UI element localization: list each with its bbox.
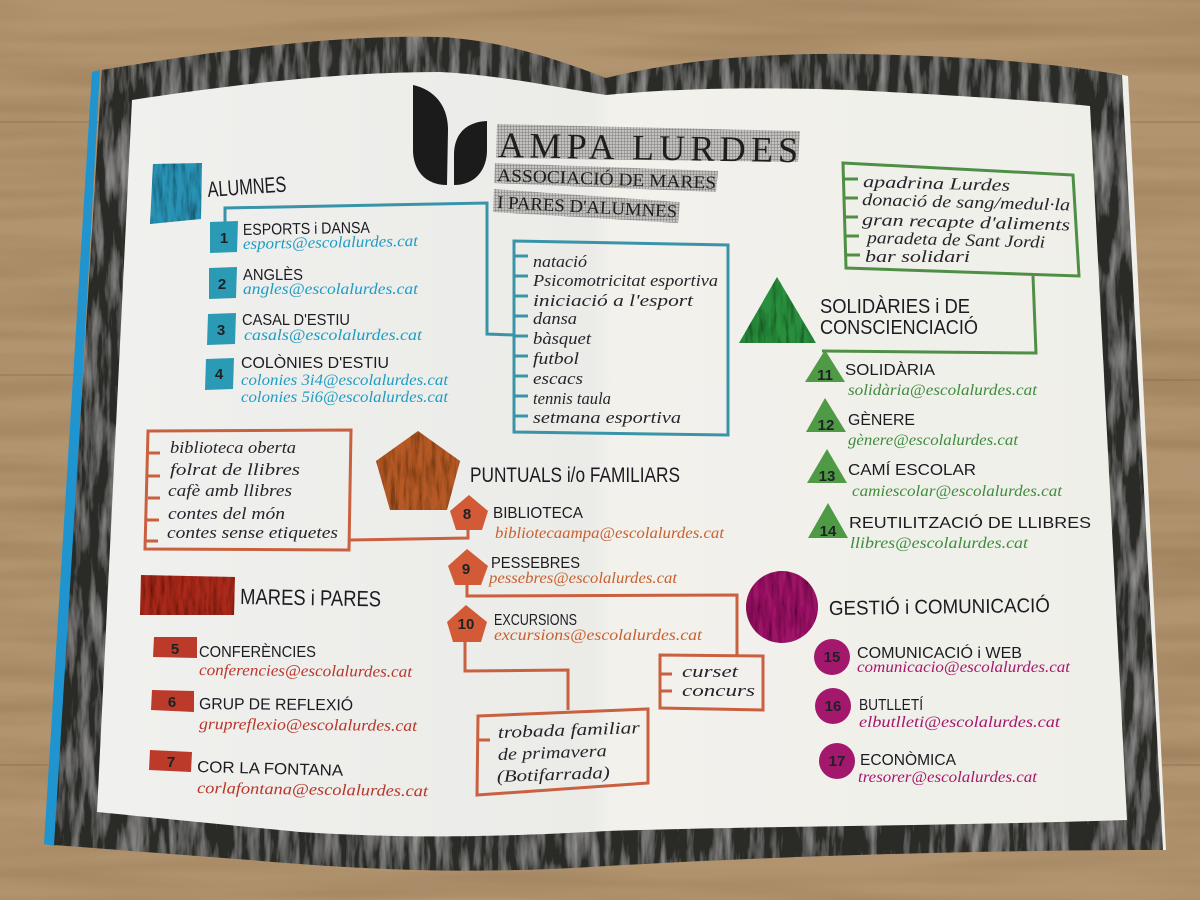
item 17: ECONÒMICA [860,750,956,769]
item 10: EXCURSIONS [494,612,577,629]
item 16: BUTLLETÍ [859,695,923,714]
item 5: CONFERÈNCIES [199,642,316,661]
panel: trobada familiar: trobada familiar [497,718,641,742]
panel: solidarity activities list: apadrina Lurdes [863,172,1011,195]
item 7: 7 [167,754,175,771]
panel: biblioteca activities list: contes del món [168,504,285,523]
item 1: 1 [220,230,228,247]
item 6: GRUP DE REFLEXIÓ [199,694,353,714]
panel: trobada familiar [477,709,648,795]
panel: curset concurs: curset [682,662,740,681]
item 3: CASAL D'ESTIU [242,312,350,329]
item 9: pessebres@escolalurdes.cat [488,570,678,587]
connector to curset box [467,585,737,655]
item 7 [149,750,429,800]
icon: green textured triangle [739,277,816,343]
item 5: conferencies@escolalurdes.cat [199,662,413,681]
panel: curset concurs: concurs [682,681,756,700]
section: alumnes [150,163,514,406]
panel: esports activities list: natació [533,252,588,271]
item 1: ESPORTS i DANSA [243,220,370,239]
heading: PUNTUALS i/o FAMILIARS [470,464,680,487]
item 8 [450,495,725,542]
panel: esports activities list: Psicomotricitat esportiva [532,271,718,290]
item 5 [153,637,413,681]
item 14: REUTILITZACIÓ DE LLIBRES [849,513,1091,532]
white page edge [1118,74,1166,850]
panel: solidarity activities list: gran recapte d'aliments [862,210,1071,234]
icon: orange textured pentagon [376,431,460,510]
item 9 [448,549,678,587]
item 15: COMUNICACIÓ i WEB [857,643,1022,662]
panel: esports activities list: futbol [533,349,579,368]
item 6: grupreflexio@escolalurdes.cat [199,716,418,735]
item 3: 3 [217,322,225,339]
item 2: angles@escolalurdes.cat [243,281,419,298]
panel: esports activities list: iniciació a l'esport [533,291,695,310]
item 10 [447,605,703,644]
item 3: casals@escolalurdes.cat [244,327,423,344]
item 10: excursions@escolalurdes.cat [494,627,703,644]
item 4: colonies 5i6@escolalurdes.cat [241,389,449,406]
icon: blue textured square [150,163,202,224]
section: gestió i comunicació [746,571,1071,786]
item 10: 10 [458,616,474,633]
item 4: 4 [215,366,224,383]
item 13: 13 [819,468,835,485]
item 6: 6 [168,694,176,711]
panel: esports activities list: setmana esportiva [533,408,681,427]
item 12 [806,398,1019,449]
section: solidàries i de conscienciació: CONSCIENCIACIÓ [820,316,978,339]
title: AMPA LURDES: AMPA LURDES [498,125,799,170]
connector to biblioteca list [350,528,468,540]
logo [413,85,487,185]
panel: biblioteca activities list: folrat de llibres [170,460,300,479]
item 15 [814,639,1071,676]
panel: biblioteca activities list: cafè amb llibres [168,481,292,500]
item 17: tresorer@escolalurdes.cat [858,769,1038,786]
panel: biblioteca activities list: biblioteca oberta [170,438,296,457]
item 12: 12 [818,417,834,434]
item 15: comunicacio@escolalurdes.cat [857,659,1071,676]
item 1 [210,220,419,253]
heading: SOLIDÀRIES i DE [820,295,970,318]
item 14: llibres@escolalurdes.cat [850,535,1029,552]
item 4: colonies 3i4@escolalurdes.cat [241,372,449,389]
item 14: 14 [820,523,837,540]
item 11: SOLIDÀRIA [845,360,935,379]
item 16: 16 [825,698,841,715]
item 6 [151,690,418,735]
item 16 [815,688,1061,731]
item 14 [808,503,1091,552]
panel: esports activities list: escacs [533,369,583,388]
item 4: COLÒNIES D'ESTIU [241,353,389,372]
panel: solidarity activities list: bar solidari [865,247,970,266]
item 11: solidària@escolalurdes.cat [848,382,1038,399]
item 12: gènere@escolalurdes.cat [848,432,1019,449]
item 15: 15 [824,649,840,666]
panel: esports activities list [514,241,728,435]
item 7: COR LA FONTANA [197,759,344,780]
item 2: 2 [218,276,226,293]
heading: ALUMNES [207,172,287,202]
item 2: ANGLÈS [243,265,303,284]
icon: purple textured circle [746,571,818,643]
subtitle line 1: ASSOCIACIÓ DE MARES [497,164,716,193]
panel: esports activities list: tennis taula [533,389,611,408]
item 16: elbutlleti@escolalurdes.cat [859,714,1061,731]
item 17: 17 [829,753,845,770]
connector to activities list [225,203,514,335]
item 5: 5 [171,641,179,658]
panel: solidarity activities list: donació de sang/medul·la [862,190,1070,214]
item 1: esports@escolalurdes.cat [243,233,419,253]
item 13: camiescolar@escolalurdes.cat [852,483,1063,500]
panel: esports activities list: dansa [533,309,577,328]
item 3 [207,312,423,345]
section: solidàries i de conscienciació [739,276,1091,552]
item 8: BIBLIOTECA [493,505,583,522]
item 17 [819,743,1038,786]
heading: GESTIÓ i COMUNICACIÓ [829,594,1050,620]
section: puntuals i/o familiars [350,431,737,710]
panel: biblioteca activities list: contes sense etiquetes [167,523,338,542]
blue spine edge [44,70,100,846]
item 9: PESSEBRES [491,555,580,572]
item 8: bibliotecaampa@escolalurdes.cat [495,525,725,542]
icon: red textured rectangle [140,575,235,615]
item 8: 8 [463,506,471,523]
paper page [97,72,1127,836]
panel: solidarity activities list [843,163,1079,276]
panel: trobada familiar: de primavera [497,741,607,764]
panel: trobada familiar: (Botifarrada) [496,763,610,786]
item 2 [209,265,419,299]
item 11: 11 [817,367,833,384]
section: mares i pares [140,575,429,800]
item 11 [805,350,1038,399]
connector [822,276,1036,353]
item 13: CAMÍ ESCOLAR [848,460,976,479]
subtitle line 2: I PARES D'ALUMNES [497,192,678,221]
item 9: 9 [462,561,470,578]
item 12: GÈNERE [848,410,915,429]
item 4 [205,353,449,406]
connector to trobada box [465,642,568,710]
item 7: corlafontana@escolalurdes.cat [197,780,429,800]
panel: biblioteca activities list [145,430,351,550]
panel: solidarity activities list: paradeta de Sant Jordi [866,228,1046,252]
panel: curset concurs [660,655,763,710]
item 13 [807,449,1063,500]
heading: MARES i PARES [240,584,381,611]
panel: esports activities list: bàsquet [533,329,592,348]
